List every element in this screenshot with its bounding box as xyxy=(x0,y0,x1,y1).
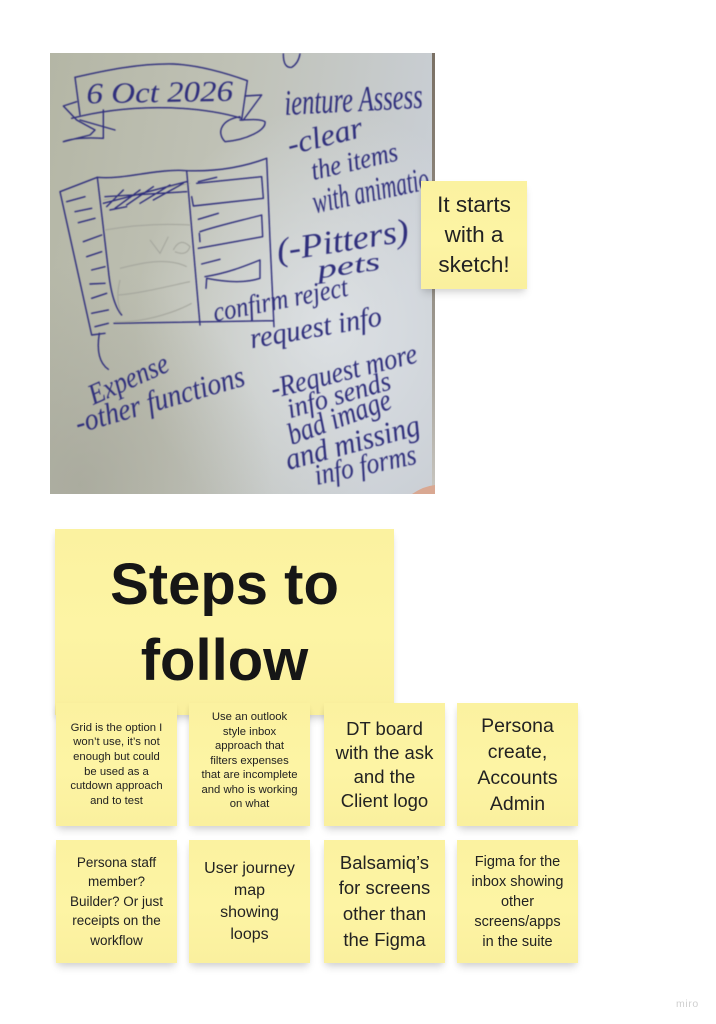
sticky note: persona staff member: member? xyxy=(88,874,145,889)
sticky note: persona staff member: workflow xyxy=(90,933,143,948)
sticky note: outlook inbox: that are incomplete xyxy=(201,769,298,781)
handwriting: confirm reject xyxy=(210,272,352,329)
sticky note: balsamiq xyxy=(324,840,445,963)
sticky note: outlook inbox: Use an outlook xyxy=(212,711,287,723)
sticky note: balsamiq: Balsamiq’s xyxy=(340,852,429,873)
sticky note: it starts with a sketch: sketch! xyxy=(438,252,510,277)
sticky note: persona staff member: Persona staff xyxy=(77,855,156,870)
handwriting: bad image xyxy=(282,383,396,452)
handwriting: -other functions xyxy=(71,359,248,440)
heading sticky: steps to follow: follow xyxy=(141,628,308,693)
sticky note: it starts with a sketch: It starts xyxy=(437,192,511,217)
sticky note: grid option xyxy=(56,703,177,826)
handwriting: (-Pitters) xyxy=(274,212,411,270)
sticky note: it starts with a sketch xyxy=(421,181,527,289)
sticky note: outlook inbox xyxy=(189,703,310,826)
handwriting: the items xyxy=(308,137,401,187)
sticky note: outlook inbox: approach that xyxy=(215,740,284,752)
sticky note: grid option: cutdown approach xyxy=(70,780,163,792)
sticky note: outlook inbox: and who is working xyxy=(201,784,298,796)
sticky note: outlook inbox: on what xyxy=(230,798,269,810)
sticky note: user journey map: showing xyxy=(220,904,279,920)
sticky note: DT board: DT board xyxy=(346,718,423,738)
ink drawing xyxy=(60,54,300,369)
sticky note: balsamiq: other than xyxy=(343,903,426,924)
handwriting xyxy=(71,76,432,492)
handwriting: and missing xyxy=(281,408,424,477)
sticky note: figma inbox xyxy=(457,840,578,963)
handwriting: -Request more xyxy=(267,338,421,405)
sticky note: outlook inbox: style inbox xyxy=(223,726,276,738)
sticky note: DT board: with the ask xyxy=(336,742,433,762)
sticky note: persona staff member: receipts on the xyxy=(72,913,161,928)
sticky note: persona accounts admin: create, xyxy=(488,740,547,762)
miro watermark: miro xyxy=(676,998,699,1010)
sticky note: user journey map xyxy=(189,840,310,963)
sticky note: persona staff member: Builder? Or just xyxy=(70,894,163,909)
sticky note: balsamiq: the Figma xyxy=(343,929,426,950)
handwriting: request info xyxy=(247,301,384,355)
sticky note: persona accounts admin: Admin xyxy=(490,792,545,814)
sticky note: persona accounts admin xyxy=(457,703,578,826)
heading sticky: steps to follow xyxy=(55,529,394,715)
sticky note: DT board xyxy=(324,703,445,826)
sticky note: DT board: and the xyxy=(354,766,415,786)
handwriting: pets xyxy=(312,247,382,285)
sticky note: balsamiq: for screens xyxy=(339,877,430,898)
handwriting: info sends xyxy=(283,366,395,425)
sticky note: grid option: be used as a xyxy=(84,766,149,778)
sticky note: user journey map: User journey xyxy=(204,860,295,876)
sticky note: figma inbox: inbox showing xyxy=(472,874,563,890)
sticky note: grid option: won’t use, it’s not xyxy=(73,736,160,748)
sticky note: user journey map: loops xyxy=(230,926,269,942)
sticky note: grid option: Grid is the option I xyxy=(71,722,162,734)
pencil ghost marks xyxy=(103,183,192,322)
heading sticky: steps to follow: Steps to xyxy=(110,552,339,617)
sticky note: it starts with a sketch: with a xyxy=(445,222,503,247)
sticky note: persona staff member xyxy=(56,840,177,963)
sticky note: grid option: enough but could xyxy=(73,751,160,763)
sticky note: figma inbox: in the suite xyxy=(482,934,553,950)
sticky note: figma inbox: other xyxy=(501,894,534,910)
sticky note: figma inbox: Figma for the xyxy=(475,854,560,870)
handwriting: -clear xyxy=(283,110,367,162)
sticky note: user journey map: map xyxy=(234,882,265,898)
sticky note: outlook inbox: filters expenses xyxy=(210,755,289,767)
handwriting: 6 Oct 2026 xyxy=(86,76,234,110)
handwriting: info forms xyxy=(311,439,419,492)
sticky note: persona accounts admin: Accounts xyxy=(477,766,558,788)
handwriting: Expense xyxy=(82,348,174,412)
sticky note: DT board: Client logo xyxy=(341,790,428,810)
sticky note: figma inbox: screens/apps xyxy=(474,914,561,930)
sticky note: grid option: and to test xyxy=(90,795,143,807)
sticky note: persona accounts admin: Persona xyxy=(481,714,554,736)
sketch photo xyxy=(50,53,435,494)
